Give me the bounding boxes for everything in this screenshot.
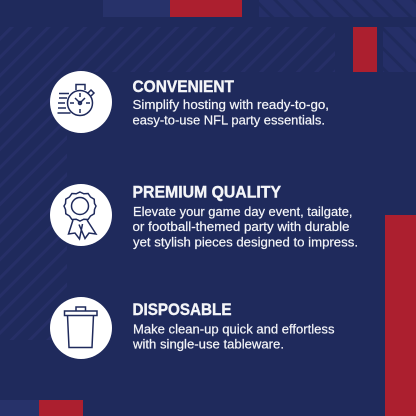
text: convenient description: easy-to-use NFL party essentials. bbox=[132, 114, 325, 128]
heading: disposable: DISPOSABLE bbox=[132, 301, 232, 319]
striped band: top right bbox=[259, 0, 416, 17]
striped band: left bbox=[0, 72, 67, 340]
text: premium quality description: Elevate your game day event, tailgate, bbox=[133, 205, 352, 219]
text: disposable description bbox=[132, 322, 334, 352]
icon: trash can bbox=[50, 297, 112, 359]
block: lower right red bbox=[385, 215, 416, 416]
text: disposable description: Make clean-up quick and effortless bbox=[133, 322, 334, 336]
text: premium quality description bbox=[132, 205, 358, 250]
heading: premium quality: PREMIUM QUALITY bbox=[132, 184, 281, 202]
text: convenient description: Simplify hosting with ready-to-go, bbox=[132, 98, 329, 112]
text: premium quality description: yet stylish pieces designed to impress. bbox=[133, 236, 358, 250]
block: bottom red bbox=[39, 400, 83, 416]
text: disposable description: with single-use tableware. bbox=[132, 338, 284, 352]
block: upper right red bbox=[353, 27, 377, 72]
block: bottom blue bbox=[0, 400, 39, 416]
heading: convenient: CONVENIENT bbox=[132, 78, 234, 96]
icon: stopwatch bbox=[50, 71, 112, 133]
text: premium quality description: or football-themed party with durable bbox=[132, 220, 350, 234]
striped band: top bbox=[0, 27, 335, 72]
striped band: right bbox=[383, 27, 416, 72]
block: top blue bbox=[103, 0, 170, 17]
text: convenient description bbox=[132, 98, 329, 128]
block: top red bbox=[170, 0, 242, 17]
icon: rosette bbox=[50, 184, 112, 246]
